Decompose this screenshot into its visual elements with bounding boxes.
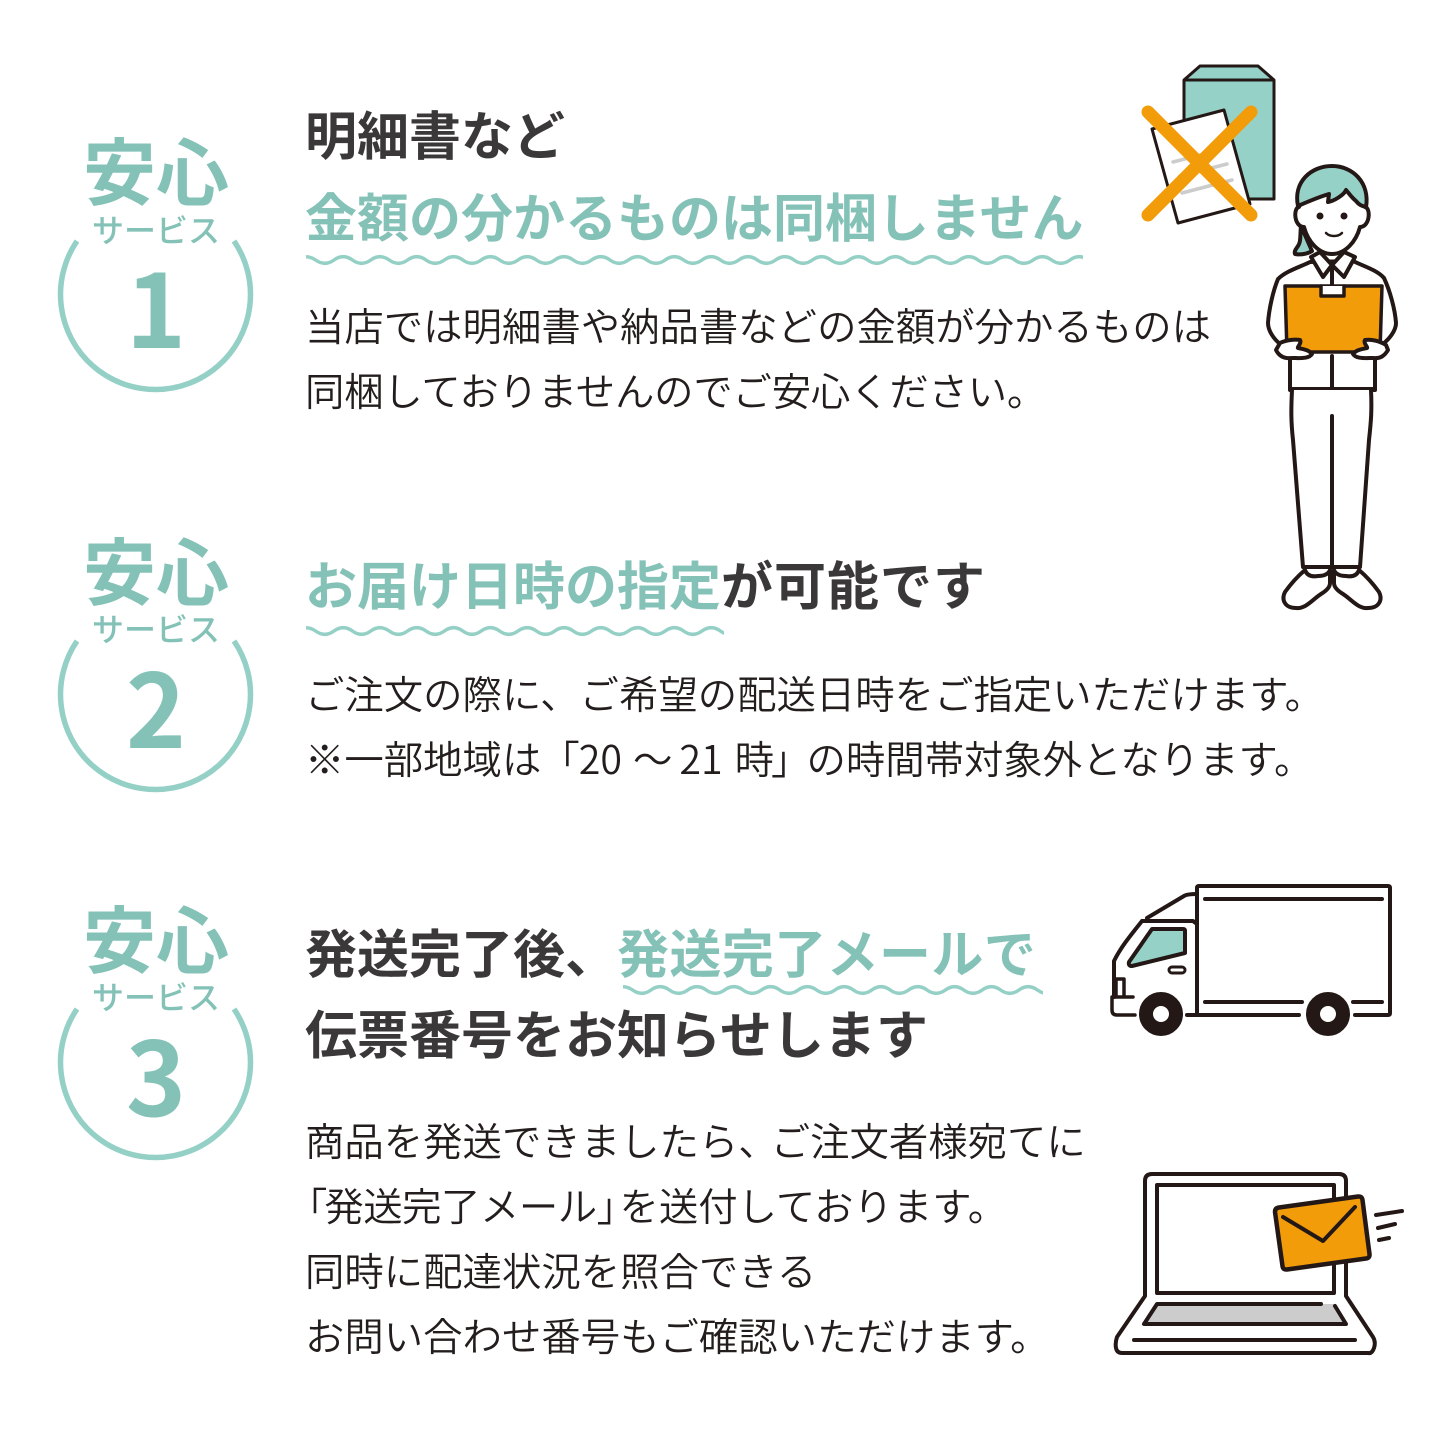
heading line two highlighted: 金額の分かるものは同梱しません (305, 177, 1083, 252)
wavy underline (306, 254, 1083, 266)
badge ring (58, 240, 254, 392)
badge heading: anshin: 安心 (83, 883, 229, 989)
heading with highlighted phrase: お届け日時の指定が可能です (305, 545, 986, 620)
body text: service 2: ご注文の際に、ご希望の配送日時をご指定いただけます。 (305, 664, 1324, 721)
wavy underline (623, 984, 1043, 996)
body text: service 1: 同梱しておりませんのでご安心ください。 (305, 361, 1046, 418)
wavy underline (306, 626, 724, 636)
body text: service 3 (288, 1111, 1086, 1363)
body text: service 3: 同時に配達状況を照合できる (305, 1241, 816, 1298)
body text: service 2 (305, 664, 1324, 786)
badge subheading: service: サービス (92, 605, 220, 651)
badge subheading: service: サービス (92, 206, 220, 252)
heading: service 1 (305, 95, 1083, 266)
body text: service 1: 当店では明細書や納品書などの金額が分かるものは (305, 296, 1211, 353)
badge number 3: 3 (126, 999, 186, 1146)
heading line two: 伝票番号をお知らせします (305, 994, 928, 1069)
body text: service 2: ※一部地域は「20 ～21 時」の時間帯対象外となります。 (305, 729, 1313, 786)
heading line one with highlighted phrase: 発送完了後、発送完了メールで (305, 913, 1036, 988)
heading: service 2 (305, 545, 986, 636)
badge subheading: service: サービス (92, 973, 220, 1019)
badge number 1: 1 (126, 231, 186, 378)
heading line one: 明細書など (305, 95, 565, 170)
panel: service 1 badge (58, 115, 254, 392)
body text: service 3: 「発送完了メール」を送付しております。 (288, 1176, 1007, 1233)
body text: service 3: お問い合わせ番号もご確認いただけます。 (305, 1306, 1049, 1363)
badge heading: anshin: 安心 (83, 115, 229, 221)
heading: service 3 (305, 913, 1043, 1069)
panel: service 3 badge (58, 883, 254, 1160)
badge heading: anshin: 安心 (83, 515, 229, 621)
badge ring (58, 1008, 254, 1160)
badge number 2: 2 (126, 631, 186, 778)
body text: service 3: 商品を発送できましたら、ご注文者様宛てに (305, 1111, 1086, 1168)
panel: service 2 badge (58, 515, 254, 792)
body text: service 1 (305, 296, 1211, 418)
badge ring (58, 640, 254, 792)
